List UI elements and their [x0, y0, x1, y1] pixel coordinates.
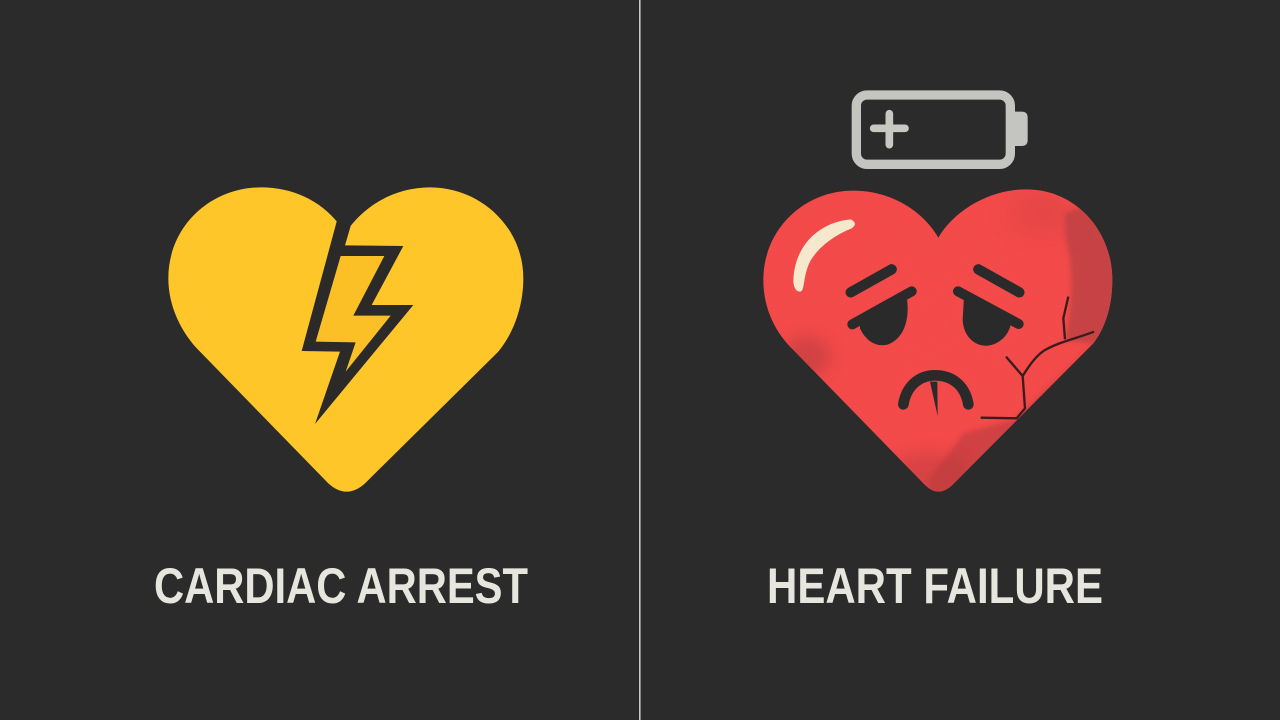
battery body — [856, 95, 1010, 164]
highlight — [793, 219, 855, 292]
battery terminal — [1015, 112, 1028, 146]
icon: broken yellow heart with lightning bolt — [168, 187, 523, 492]
label: heart failure: HEART FAILURE — [767, 558, 1103, 614]
left eye — [852, 291, 912, 345]
right eye — [958, 291, 1019, 346]
panel: heart failure — [750, 95, 1130, 614]
frown mouth — [903, 375, 968, 404]
panel: cardiac arrest — [154, 187, 528, 614]
icon: empty battery — [856, 95, 1028, 164]
lightning bolt fill — [316, 256, 391, 372]
plus sign — [874, 114, 905, 145]
heart shape — [763, 189, 1112, 492]
heart shape — [168, 187, 523, 492]
left eyebrow — [851, 269, 892, 292]
mouth crack — [930, 382, 938, 416]
icon: sad red heart — [763, 189, 1112, 492]
label: cardiac arrest: CARDIAC ARREST — [154, 558, 528, 614]
right eyebrow — [978, 269, 1019, 292]
heart cracks — [981, 297, 1094, 418]
shaded texture — [764, 190, 1112, 492]
divider — [639, 0, 641, 720]
lightning bolt crack — [302, 222, 413, 424]
